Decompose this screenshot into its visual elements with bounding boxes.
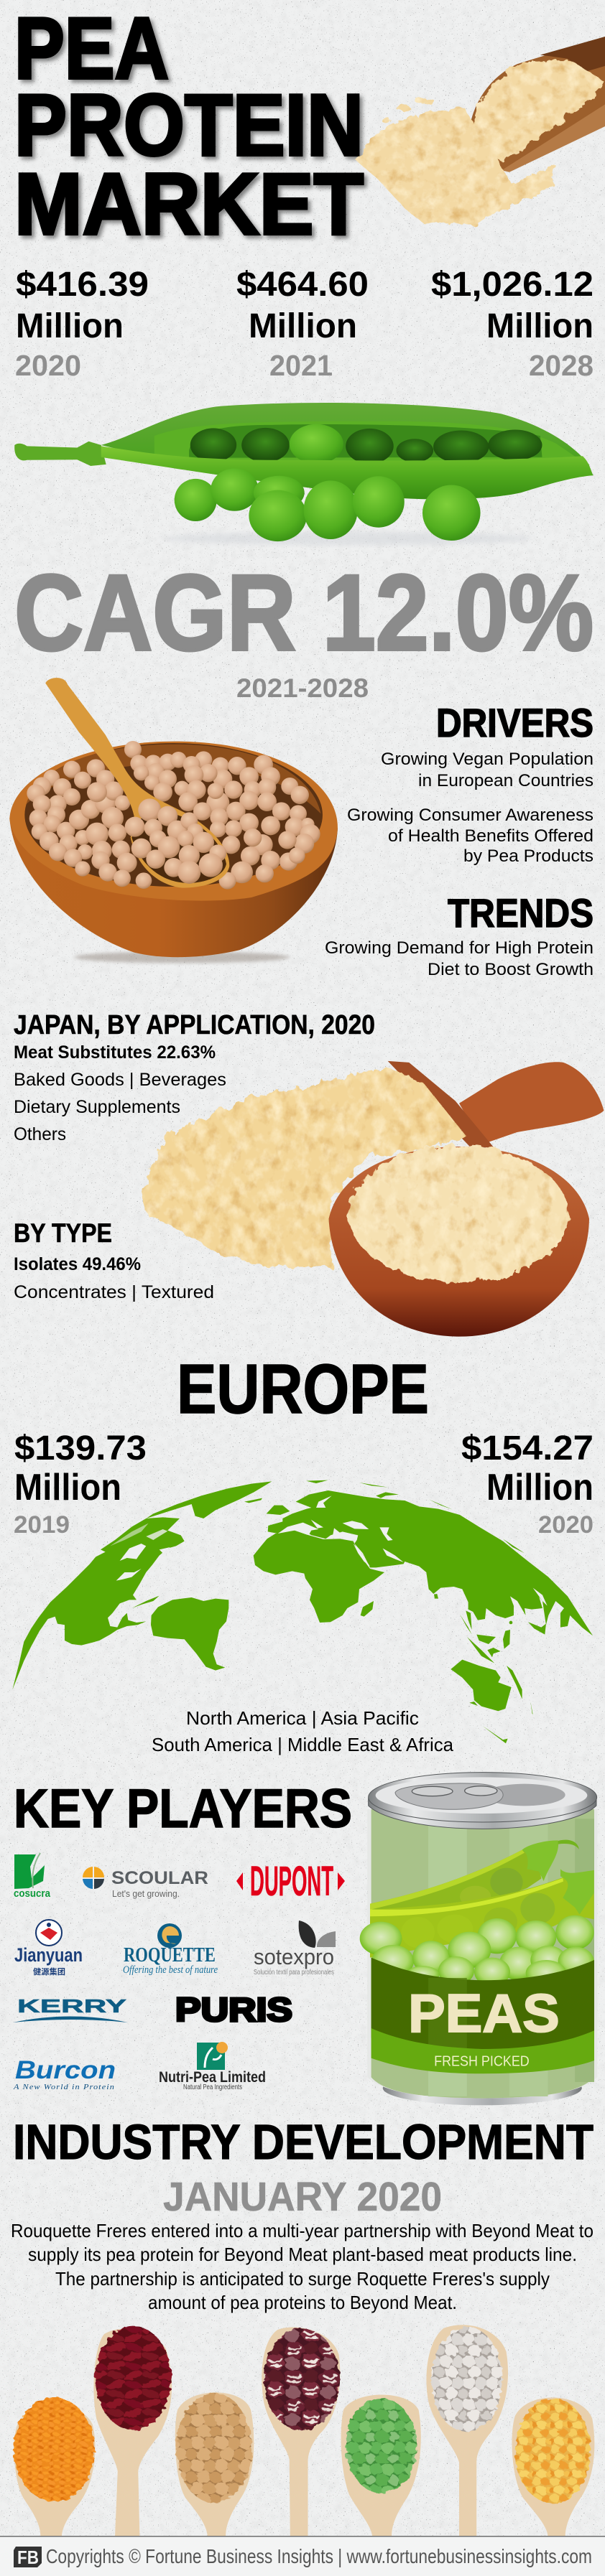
spoon: white beans <box>426 2325 508 2537</box>
logo: Sotexpro <box>254 1921 336 1977</box>
heading: Europe: EUROPE <box>177 1350 429 1428</box>
footer logo: FB <box>17 2547 39 2568</box>
title: PROTEIN <box>14 76 364 174</box>
stat: Europe 2019: $139.73 <box>14 1429 147 1467</box>
heading: key players: KEY PLAYERS <box>14 1778 352 1839</box>
driver 2 <box>347 806 594 866</box>
logo: Jianyuan: Jianyuan <box>14 1944 83 1966</box>
image: wooden bowl of chickpeas <box>9 678 338 963</box>
trend text: Diet to Boost Growth <box>428 960 594 979</box>
logo: Sotexpro: sotexpro <box>254 1944 334 1969</box>
trend text <box>325 938 594 979</box>
stat: 2028 market size: Million <box>486 307 594 345</box>
stat: Europe 2020: Million <box>486 1467 594 1508</box>
stat: 2021 market size: $464.60 <box>236 266 369 304</box>
stat: Europe 2020: $154.27 <box>461 1429 594 1467</box>
stat: 2028 market size: $1,026.12 <box>431 266 594 304</box>
logo: Nutri-Pea Limited: Natural Pea Ingredients <box>183 2083 242 2091</box>
image: pea flour pile, scoop and bowl <box>141 1061 604 1337</box>
title: PEA <box>14 0 169 97</box>
type list: Isolates 49.46% <box>14 1254 141 1274</box>
logo: Cosucra <box>14 1853 51 1900</box>
stat: 2020 market size <box>15 266 149 382</box>
application list: Baked Goods | Beverages <box>14 1070 226 1090</box>
logo: Scoular: SCOULAR <box>111 1868 208 1888</box>
logo: DuPont: DUPONT <box>250 1858 333 1905</box>
spoon: yellow split peas <box>512 2397 594 2537</box>
logo: Puris: PURIS <box>175 1991 292 2028</box>
driver 1: Growing Vegan Population <box>381 750 594 769</box>
driver 2: by Pea Products <box>463 846 594 866</box>
logo: Scoular <box>83 1867 208 1899</box>
development description: supply its pea protein for Beyond Meat plant-based meat products line. <box>28 2244 577 2265</box>
title: MARKET <box>14 155 364 253</box>
development description: amount of pea proteins to Beyond Meat. <box>148 2292 457 2313</box>
spoon: kidney beans <box>93 2326 172 2537</box>
stat: Europe 2019: Million <box>14 1467 121 1508</box>
driver 1: in European Countries <box>418 771 594 790</box>
logo: Roquette: Offering the best of nature <box>123 1964 218 1976</box>
application list: Meat Substitutes 22.63% <box>14 1042 216 1063</box>
regions list: South America | Middle East & Africa <box>152 1734 454 1755</box>
logo: Jianyuan <box>14 1920 83 1977</box>
stat: 2021 market size: 2021 <box>269 349 333 382</box>
spoon: speckled beans <box>262 2327 340 2537</box>
application list: Dietary Supplements <box>14 1097 180 1117</box>
logo: Roquette: ROQUETTE <box>124 1944 216 1966</box>
stat: Europe 2020: 2020 <box>538 1511 594 1539</box>
logo: Nutri-Pea Limited <box>159 2042 266 2091</box>
title <box>14 0 364 253</box>
stat: 2021 market size: Million <box>249 307 357 345</box>
logo: Burcon <box>13 2056 116 2091</box>
logo: Jianyuan: 健源集团 <box>33 1966 65 1977</box>
stat: 2020 market size: Million <box>16 307 124 345</box>
image: scoop of pea protein powder <box>357 37 605 224</box>
date: January 2020: JANUARY 2020 <box>163 2174 442 2220</box>
stat: 2020 market size: $416.39 <box>16 266 149 304</box>
stat: 2021 market size <box>236 266 369 382</box>
logo: Sotexpro: Solución textil para profesionales <box>254 1969 334 1977</box>
application list: Others <box>14 1124 66 1144</box>
stat: Europe 2019 <box>14 1429 147 1539</box>
logo: Scoular: Let's get growing. <box>112 1888 180 1899</box>
map: Africa, Eurasia and Oceania <box>254 1480 593 1743</box>
regions list <box>152 1707 454 1755</box>
stat: 2020 market size: 2020 <box>15 349 81 382</box>
driver 2: of Health Benefits Offered <box>388 826 594 846</box>
stat: 2028 market size <box>431 266 594 382</box>
application list <box>14 1042 226 1144</box>
logo: Kerry: KERRY <box>17 1995 126 2017</box>
world map <box>12 1480 593 1743</box>
stat: Europe 2019: 2019 <box>14 1511 70 1539</box>
logo: Nutri-Pea Limited: Nutri-Pea Limited <box>159 2069 266 2086</box>
driver 1 <box>381 750 594 790</box>
driver 2: Growing Consumer Awareness <box>347 806 594 825</box>
development description <box>11 2220 594 2313</box>
image: open pea pod with peas <box>14 403 594 545</box>
logo: Roquette <box>123 1923 218 1976</box>
logo: Burcon: A New World in Protein <box>13 2083 115 2091</box>
CAGR period: 2021-2028 <box>236 673 369 703</box>
image: wooden spoons with legumes <box>14 2325 594 2537</box>
spoon: green peas <box>341 2394 421 2537</box>
image: can of peas <box>360 1773 597 2105</box>
logo: Kerry <box>13 1995 128 2022</box>
logo: Burcon: Burcon <box>15 2056 116 2084</box>
spoon: red lentils <box>14 2397 95 2537</box>
stat: 2028 market size: 2028 <box>529 349 594 382</box>
spoon: chickpeas <box>175 2392 254 2537</box>
logo: Cosucra: cosucra <box>14 1887 51 1900</box>
regions list: North America | Asia Pacific <box>186 1707 419 1729</box>
type list: Concentrates | Textured <box>14 1282 214 1302</box>
type list <box>14 1254 214 1302</box>
logo: DuPont <box>236 1858 345 1905</box>
trend text: Growing Demand for High Protein <box>325 938 594 958</box>
map: Americas and Greenland <box>12 1481 272 1689</box>
heading: Japan by application: JAPAN, BY APPLICATION, 2020 <box>14 1010 375 1040</box>
development description: The partnership is anticipated to surge Roquette Freres's supply <box>55 2268 550 2290</box>
stat: Europe 2020 <box>461 1429 594 1539</box>
footer bar <box>0 2536 605 2576</box>
heading: by type: BY TYPE <box>14 1218 112 1248</box>
